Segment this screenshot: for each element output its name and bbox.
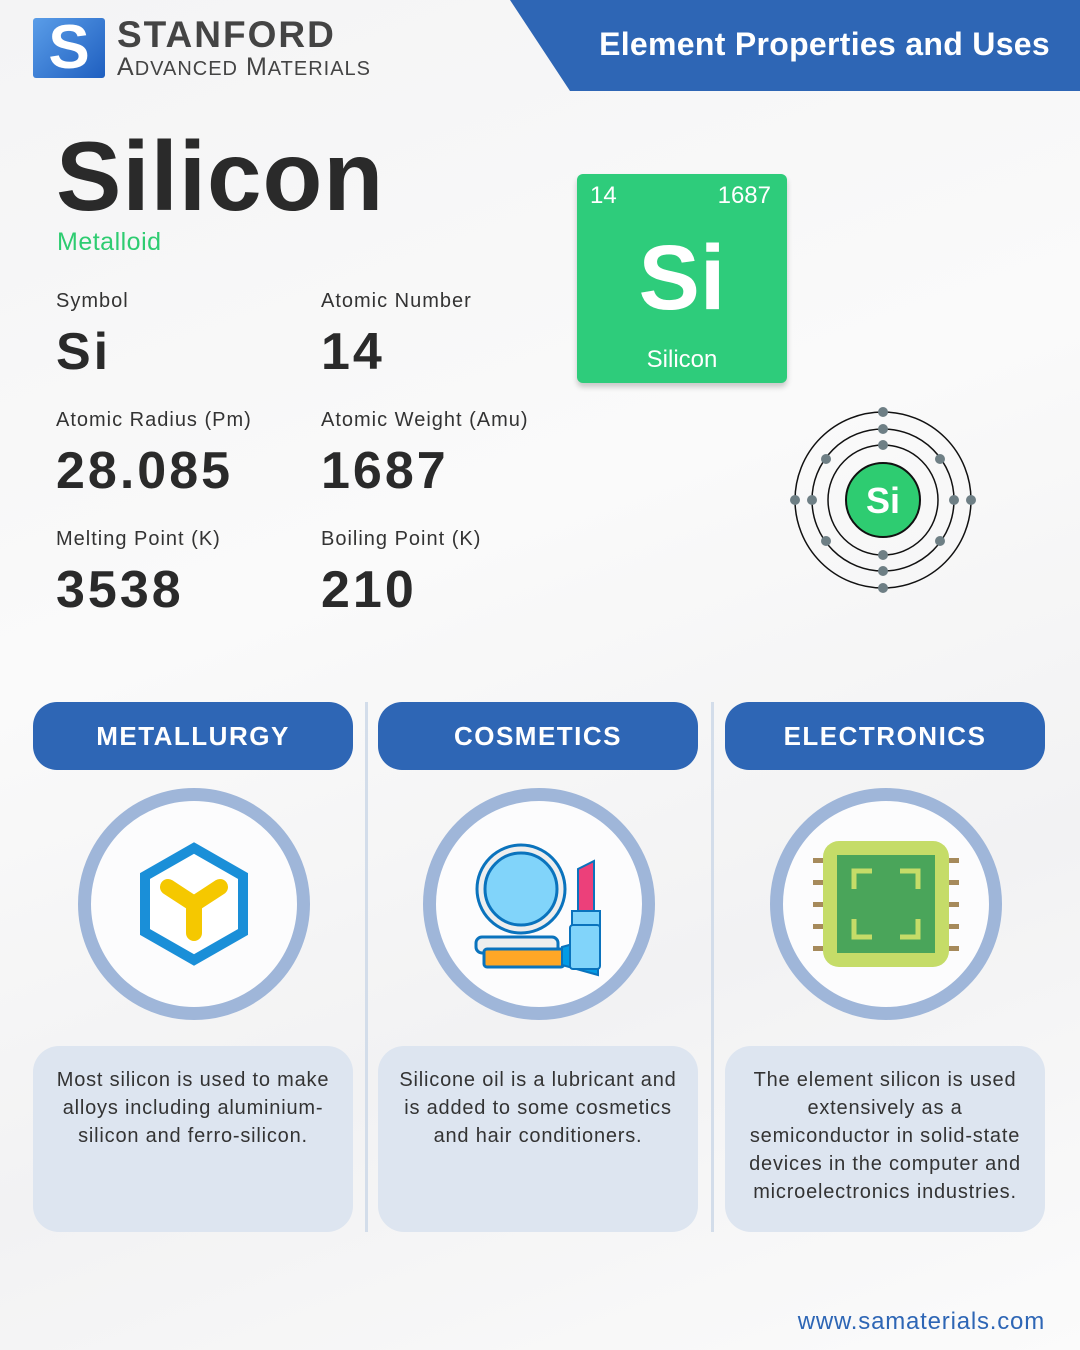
text: metallurgy: Most silicon is used to make	[57, 1069, 329, 1091]
text: electronics: The element silicon is used	[754, 1069, 1016, 1091]
logo	[33, 13, 371, 82]
properties grid: 210	[321, 561, 417, 619]
properties grid: Atomic Number	[321, 290, 472, 312]
properties grid: 3538	[56, 561, 184, 619]
icon: chip	[770, 788, 1002, 1020]
element tile: 1687	[718, 182, 771, 209]
properties grid: Atomic Radius (Pm)	[56, 409, 252, 431]
heading: cosmetics	[378, 702, 698, 770]
heading: metallurgy	[33, 702, 353, 770]
icon: logo S	[33, 18, 105, 78]
text: cosmetics: is added to some cosmetics	[404, 1097, 672, 1119]
properties grid: 14	[321, 323, 385, 381]
text: electronics: microelectronics industries.	[753, 1181, 1017, 1203]
text: cosmetics: and hair conditioners.	[434, 1125, 642, 1147]
panel: electronics	[725, 702, 1045, 1232]
properties grid: Symbol	[56, 290, 129, 312]
logo text: ADVANCED MATERIALS	[117, 53, 371, 81]
element tile: Silicon	[647, 346, 717, 373]
text: metallurgy: alloys including aluminium-	[63, 1097, 323, 1119]
atom diagram: Si	[866, 480, 900, 521]
text: metallurgy	[33, 1046, 353, 1232]
logo text	[117, 14, 371, 81]
properties grid: Si	[56, 323, 111, 381]
icon: cosmetics	[423, 788, 655, 1020]
logo text: STANFORD	[117, 14, 336, 55]
properties grid: Atomic Weight (Amu)	[321, 409, 529, 431]
panel: cosmetics	[378, 702, 698, 1232]
text: metallurgy: silicon and ferro-silicon.	[78, 1125, 308, 1147]
element tile: 14	[590, 182, 617, 209]
properties grid: 1687	[321, 442, 449, 500]
properties grid: Boiling Point (K)	[321, 528, 481, 550]
heading: electronics: ELECTRONICS	[784, 721, 986, 751]
text: cosmetics	[378, 1046, 698, 1232]
icon: logo S: S	[48, 13, 90, 82]
properties grid: 28.085	[56, 442, 233, 500]
text: cosmetics: Silicone oil is a lubricant and	[399, 1069, 677, 1091]
panel: metallurgy	[33, 702, 353, 1232]
icon: hexagon	[78, 788, 310, 1020]
subtitle: category: Metalloid	[57, 228, 162, 256]
properties grid	[56, 290, 529, 619]
heading: metallurgy: METALLURGY	[96, 721, 290, 751]
header banner	[510, 0, 1080, 91]
heading: cosmetics: COSMETICS	[454, 721, 622, 751]
properties grid: Melting Point (K)	[56, 528, 221, 550]
text: electronics: devices in the computer and	[749, 1153, 1021, 1175]
element tile: Si	[639, 227, 725, 329]
element tile	[577, 174, 787, 383]
heading: electronics	[725, 702, 1045, 770]
text: electronics	[725, 1046, 1045, 1232]
header banner: Element Properties and Uses	[599, 26, 1050, 62]
atom diagram	[790, 407, 976, 593]
footer url: www.samaterials.com	[798, 1308, 1045, 1335]
text: electronics: semiconductor in solid-state	[750, 1125, 1020, 1147]
text: electronics: extensively as a	[807, 1097, 963, 1119]
title: Silicon	[56, 121, 384, 231]
